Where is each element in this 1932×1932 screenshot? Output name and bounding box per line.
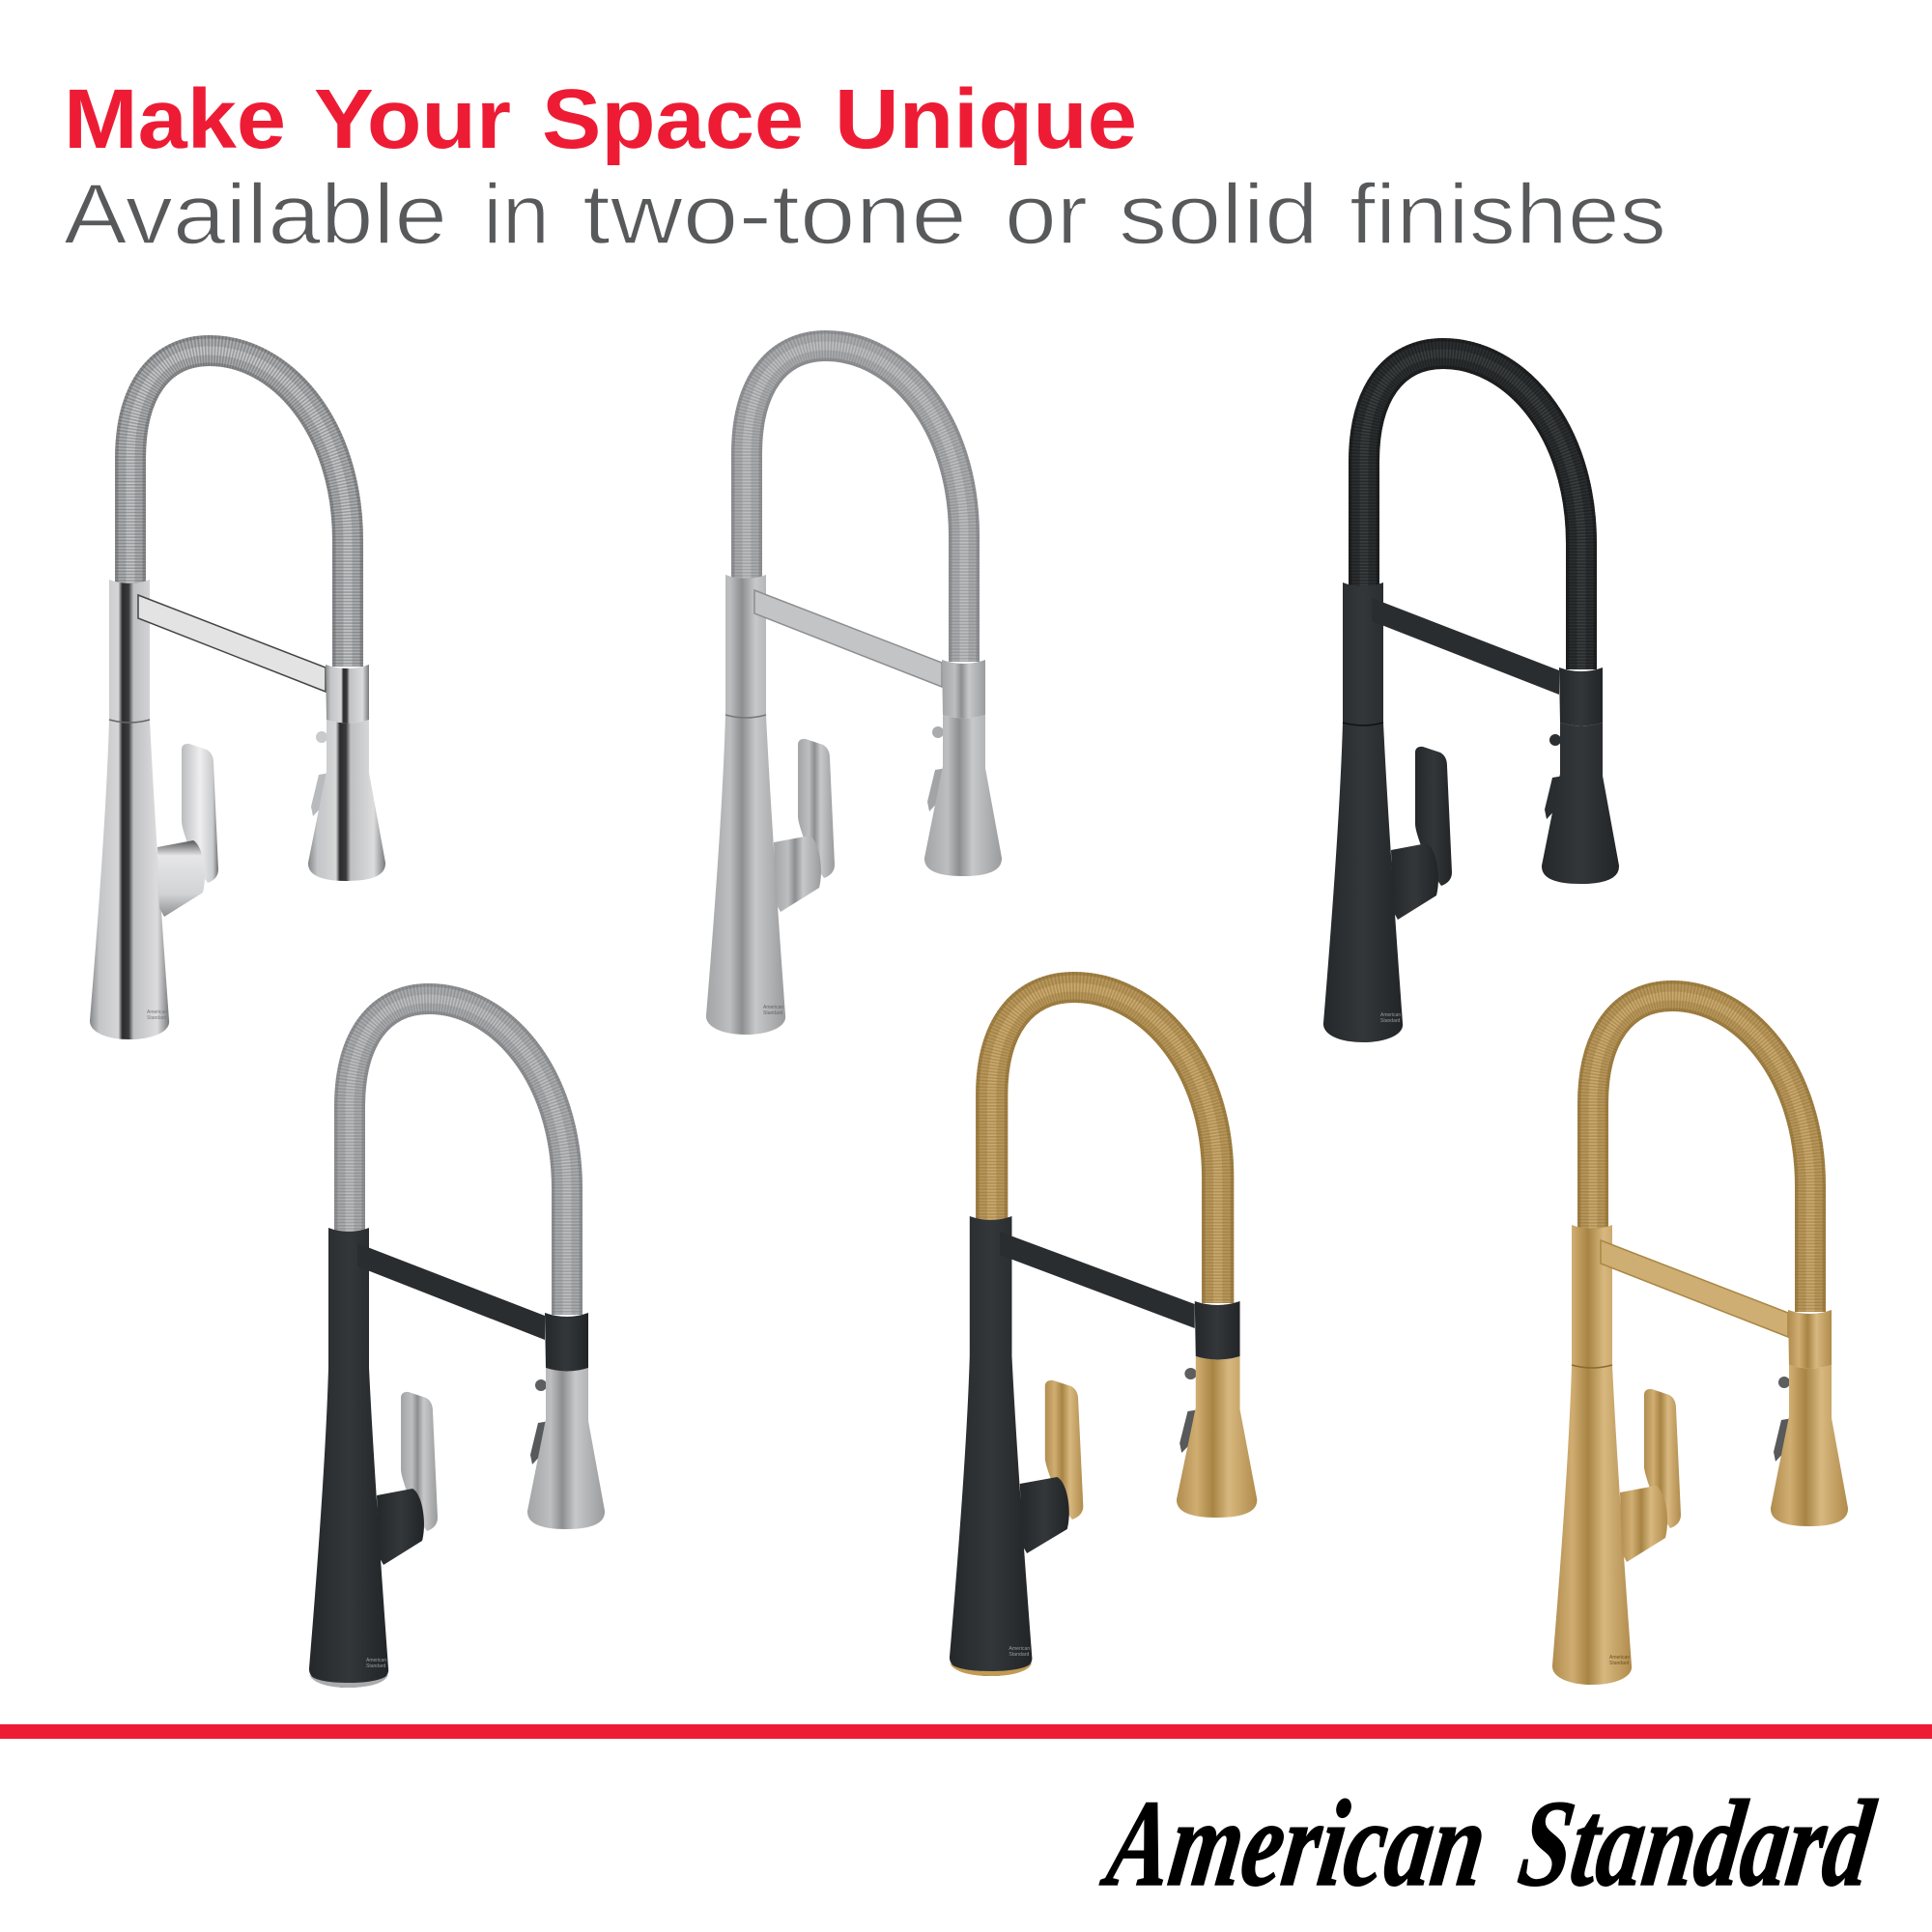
title: Space	[542, 72, 804, 166]
connecting bar	[754, 590, 942, 687]
title: Your	[314, 72, 511, 166]
title: Unique	[835, 72, 1137, 166]
faucet: black and stainless	[309, 999, 605, 1688]
brand mark: Standard	[366, 1663, 386, 1669]
handle connector	[1020, 1477, 1069, 1553]
handle paddle	[1415, 747, 1452, 886]
brand mark: Standard	[1380, 1018, 1401, 1024]
spray trigger	[311, 773, 330, 816]
body	[706, 575, 785, 1035]
handle paddle	[798, 739, 835, 878]
spray collar	[942, 660, 985, 719]
subtitle: in	[483, 166, 550, 262]
faucet: brushed gold	[1552, 996, 1848, 1685]
connecting bar	[357, 1243, 545, 1340]
brand mark: Standard	[1009, 1652, 1030, 1658]
brand mark: American	[366, 1658, 386, 1663]
brand mark: American	[763, 1005, 783, 1010]
brand mark: American	[1380, 1012, 1401, 1018]
brand mark: American	[1009, 1646, 1030, 1652]
brand mark: Standard	[147, 1015, 167, 1021]
connecting bar	[1372, 598, 1559, 695]
hose	[992, 987, 1218, 1303]
subtitle: two-tone	[582, 166, 967, 262]
handle connector	[377, 1489, 424, 1565]
base ring	[309, 1674, 388, 1688]
faucet: brushed steel	[706, 346, 1002, 1035]
spray trigger	[530, 1421, 550, 1464]
subtitle: solid	[1119, 166, 1319, 262]
spray collar	[1195, 1301, 1240, 1360]
faucet: polished chrome	[90, 351, 385, 1039]
handle connector	[774, 836, 821, 912]
body	[1323, 582, 1403, 1042]
spray button	[1184, 1368, 1197, 1379]
hose	[747, 346, 964, 662]
body seam	[109, 720, 150, 723]
brand mark: American	[1609, 1655, 1630, 1661]
spray button	[932, 726, 944, 738]
handle paddle	[1045, 1380, 1083, 1520]
brand mark: American	[147, 1009, 167, 1015]
spray head	[527, 1368, 605, 1529]
brand logo: American	[1095, 1775, 1494, 1912]
spray button	[535, 1379, 547, 1391]
spray collar	[326, 665, 369, 723]
title: Make	[64, 72, 286, 166]
connecting bar	[1601, 1240, 1788, 1337]
handle connector	[1620, 1486, 1667, 1562]
subtitle: or	[1005, 166, 1088, 262]
brand mark: Standard	[1609, 1661, 1630, 1666]
handle connector	[157, 840, 205, 917]
subtitle: Available	[64, 166, 447, 262]
spray trigger	[1774, 1418, 1793, 1462]
spray head	[1771, 1365, 1848, 1526]
body	[309, 1228, 388, 1688]
connecting bar	[1000, 1232, 1195, 1328]
spray trigger	[927, 768, 947, 811]
faucet: black and gold	[950, 987, 1257, 1676]
faucet: matte black	[1323, 354, 1619, 1042]
spray button	[316, 731, 327, 743]
spray head	[924, 715, 1002, 876]
handle paddle	[1644, 1389, 1681, 1528]
body	[1552, 1225, 1632, 1685]
handle paddle	[401, 1392, 438, 1531]
spray button	[1778, 1377, 1790, 1388]
hose	[350, 999, 567, 1315]
body seam	[1572, 1365, 1612, 1368]
spray button	[1549, 734, 1561, 746]
spray head	[1542, 723, 1619, 884]
spray head	[1177, 1356, 1257, 1518]
hose	[1593, 996, 1810, 1312]
handle paddle	[182, 744, 218, 883]
spray collar	[545, 1313, 588, 1372]
hose	[1364, 354, 1581, 669]
base ring	[950, 1662, 1032, 1676]
red divider bar	[0, 1724, 1932, 1739]
subtitle: finishes	[1350, 166, 1666, 262]
spray collar	[1559, 668, 1603, 726]
spray trigger	[1545, 776, 1564, 819]
hose	[130, 351, 348, 667]
brand mark: Standard	[763, 1010, 783, 1016]
spray head	[308, 720, 385, 881]
body seam	[1343, 723, 1383, 725]
body seam	[725, 715, 766, 718]
spray collar	[1788, 1310, 1832, 1368]
body	[90, 580, 169, 1039]
handle connector	[1391, 843, 1438, 920]
spray trigger	[1179, 1409, 1200, 1453]
connecting bar	[138, 595, 326, 692]
body	[950, 1216, 1032, 1676]
